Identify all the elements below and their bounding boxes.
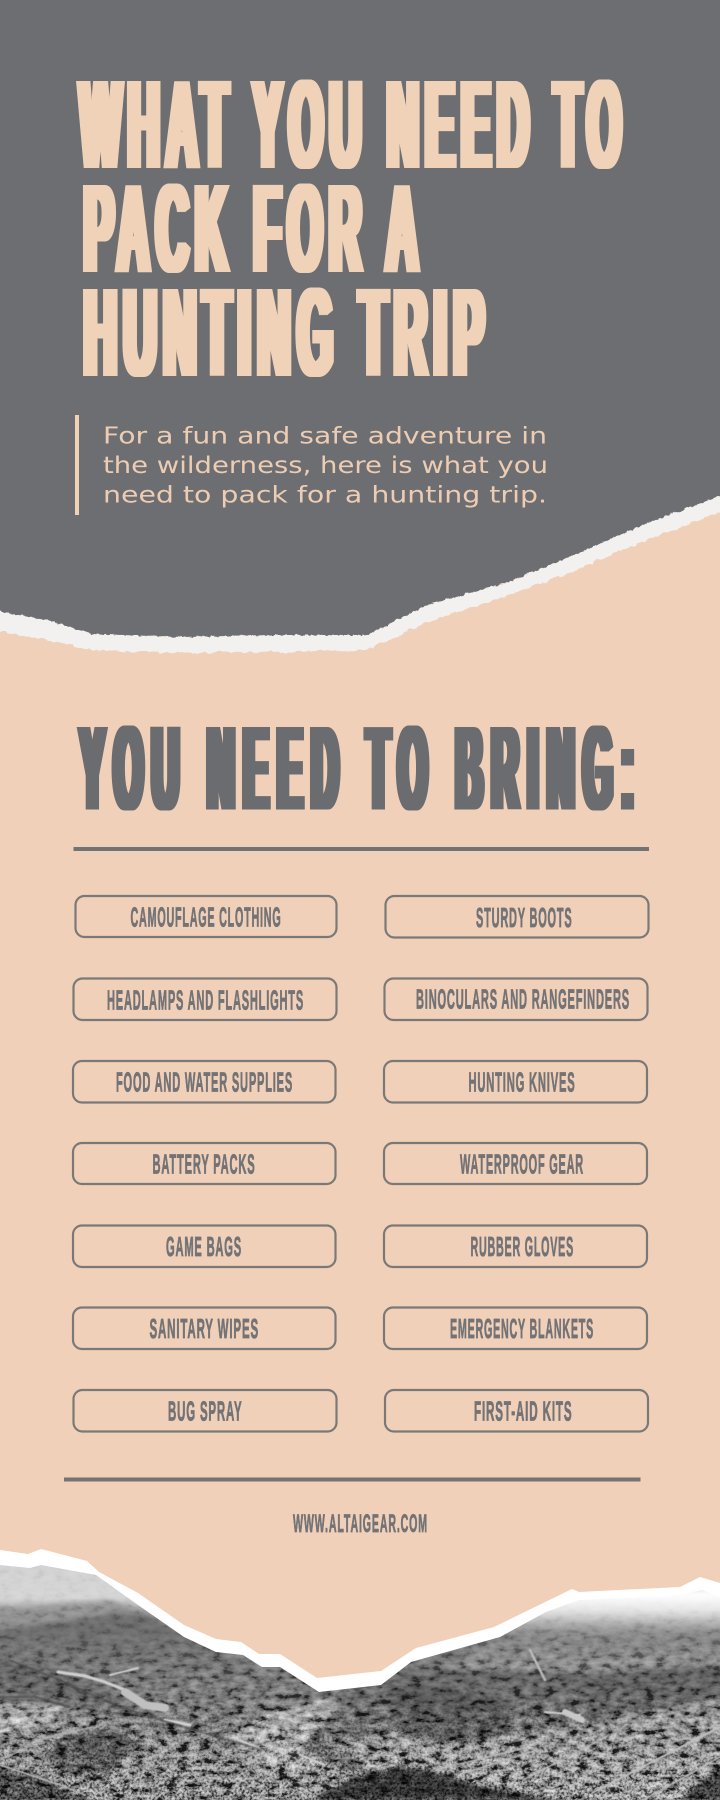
item: food and water supplies	[73, 1061, 336, 1102]
intro paragraph	[103, 424, 548, 508]
item: camouflage clothing	[76, 896, 336, 937]
intro paragraph: need to pack for a hunting trip.	[103, 482, 547, 508]
panel: packing list: HEADLAMPS AND FLASHLIGHTS	[107, 984, 304, 1016]
left midground slope	[0, 1705, 353, 1800]
left dark hill	[40, 1728, 140, 1778]
item: binoculars and rangefinders	[384, 978, 648, 1020]
item: sanitary wipes	[73, 1308, 336, 1349]
item: battery packs: BATTERY PACKS	[152, 1148, 256, 1180]
ridge layers	[0, 1590, 720, 1800]
texture: terrain	[0, 1600, 720, 1800]
item: sanitary wipes: SANITARY WIPES	[150, 1313, 259, 1344]
far ridge left	[2, 1598, 133, 1628]
torn white photo border	[0, 1549, 720, 1800]
intro text block	[75, 415, 548, 515]
mountain landscape	[0, 1560, 720, 1800]
right midground slope	[340, 1695, 720, 1800]
intro paragraph: For a fun and safe adventure in	[103, 424, 547, 450]
item: game bags: GAME BAGS	[166, 1231, 242, 1262]
item: headlamps and flashlights	[74, 978, 336, 1020]
divider: top	[74, 847, 649, 851]
right mid mountain	[574, 1668, 720, 1735]
accent bar	[75, 415, 79, 515]
item: rubber gloves	[384, 1226, 647, 1267]
foreground left forest	[0, 1765, 90, 1800]
valley slope	[225, 1697, 340, 1770]
texture: forest	[0, 1702, 720, 1800]
valley village and road highlights	[0, 1650, 720, 1800]
item: hunting knives	[384, 1061, 647, 1102]
grey header background	[0, 0, 720, 637]
item: emergency blankets	[384, 1308, 647, 1349]
panel: torn paper header	[0, 0, 720, 653]
central and right hills	[0, 1660, 720, 1778]
text: WWW.ALTAIGEAR.COM	[293, 1510, 428, 1538]
item: sturdy boots	[386, 896, 648, 938]
right ridge far	[453, 1637, 720, 1674]
foreground dark hill	[310, 1765, 560, 1800]
torn white paper edge	[0, 488, 720, 653]
light patch left	[0, 1703, 64, 1735]
item: first-aid kits	[385, 1390, 648, 1432]
item: camouflage clothing: CAMOUFLAGE CLOTHING	[130, 902, 282, 932]
intro paragraph: the wilderness, here is what you	[103, 453, 548, 479]
central dark hill	[385, 1685, 510, 1745]
foreground right hill	[680, 1765, 720, 1800]
item: bug spray: BUG SPRAY	[168, 1396, 242, 1426]
item: game bags	[73, 1226, 336, 1267]
right haze	[503, 1590, 720, 1638]
item: waterproof gear	[384, 1143, 647, 1184]
divider: bottom	[64, 1478, 640, 1482]
title	[80, 54, 628, 403]
panel: packing list	[73, 896, 648, 1432]
item: battery packs	[73, 1143, 336, 1184]
item: bug spray	[74, 1390, 336, 1432]
panel: packing list: FOOD AND WATER SUPPLIES	[116, 1066, 293, 1098]
item: sturdy boots: STURDY BOOTS	[476, 902, 572, 933]
dark ridge left	[0, 1610, 214, 1658]
dark ridge lines	[0, 1660, 262, 1750]
item: first-aid kits: FIRST-AID KITS	[474, 1396, 572, 1426]
panel: torn mountain photo	[0, 1549, 720, 1800]
